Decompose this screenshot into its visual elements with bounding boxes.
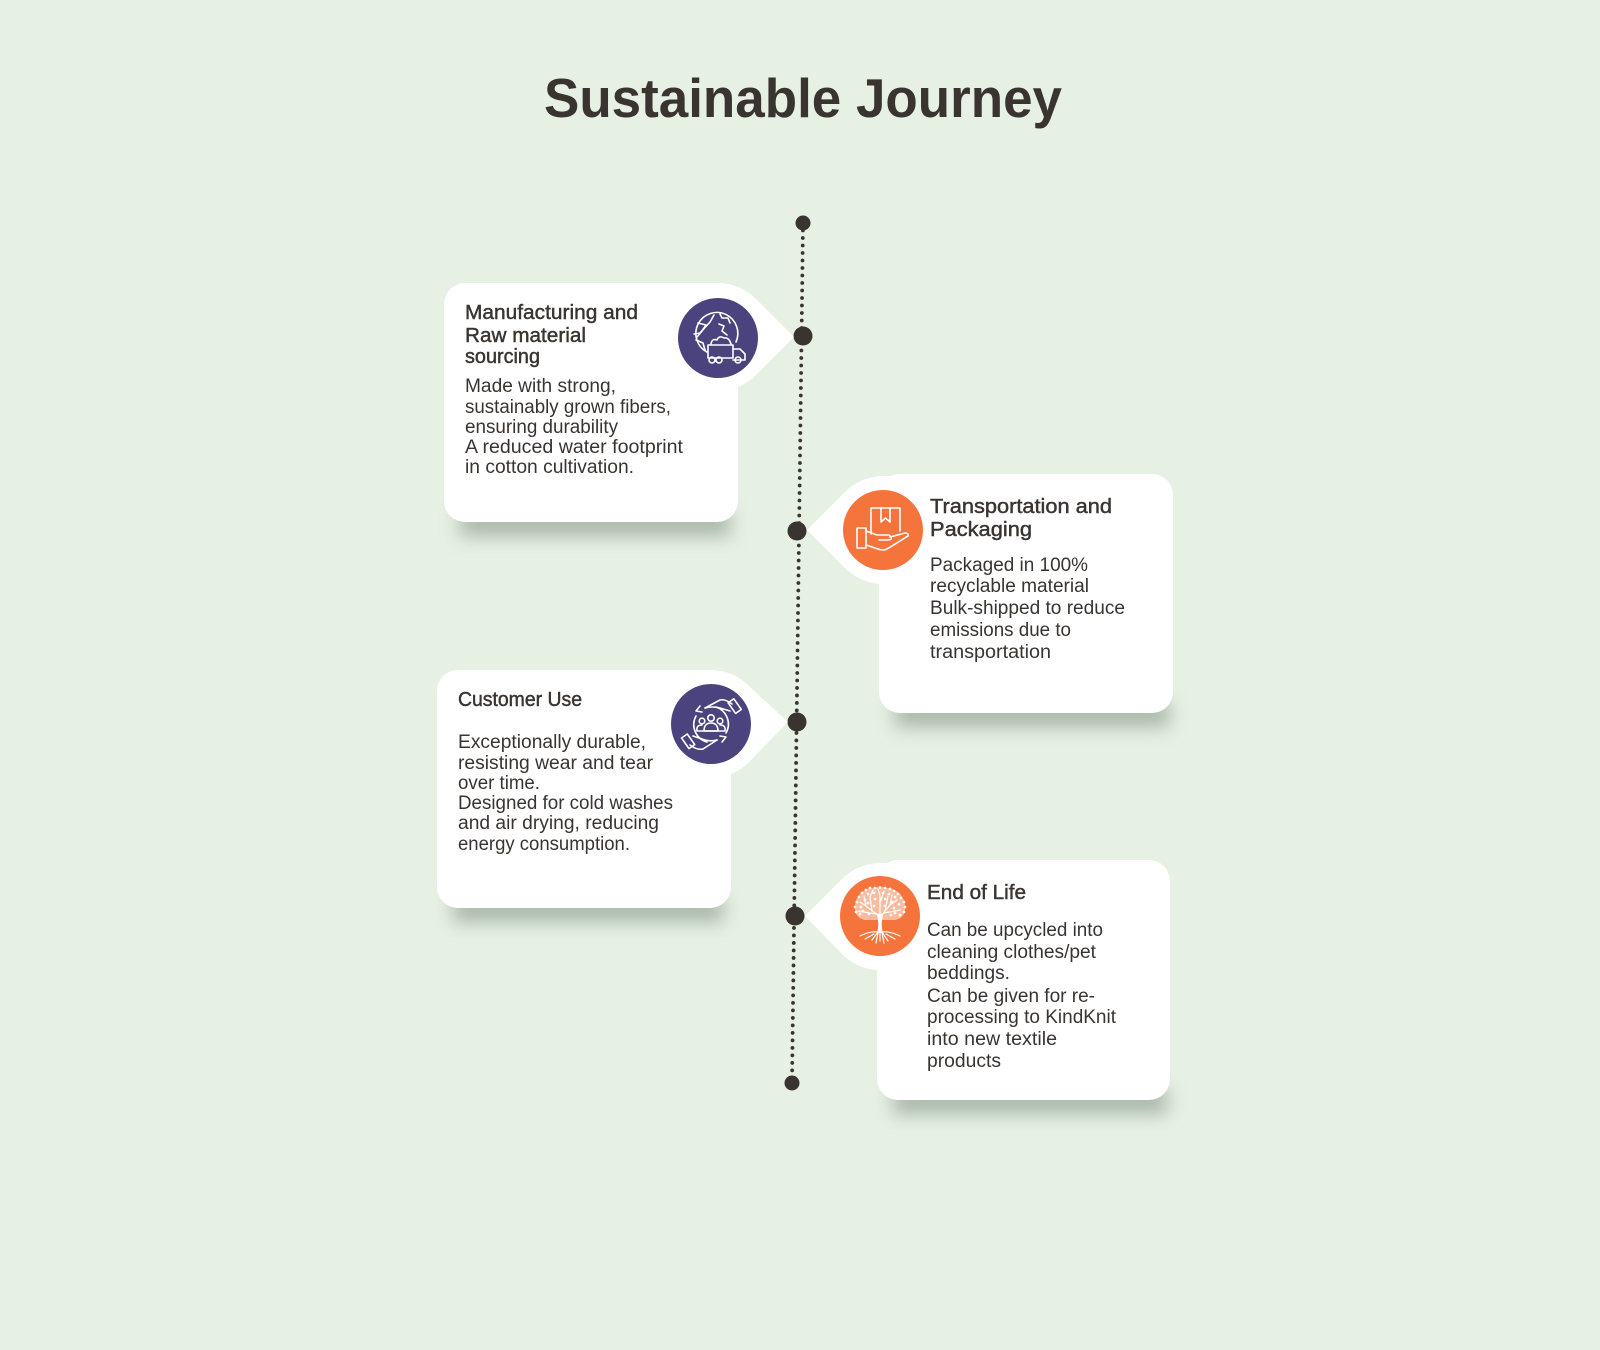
heading: manufacturing: Manufacturing and <box>465 301 638 324</box>
text: end of life details <box>927 920 1117 1072</box>
panel: manufacturing and raw material sourcing <box>444 283 794 536</box>
text: transportation details: emissions due to <box>930 620 1071 641</box>
icon: tree with roots <box>840 876 920 956</box>
text: end of life details: Can be upcycled into <box>927 920 1103 941</box>
icon: globe and truck <box>678 298 758 378</box>
heading: end of life: End of Life <box>927 881 1026 904</box>
panel: customer use <box>437 670 788 922</box>
text: manufacturing details: A reduced water footprint <box>465 437 684 458</box>
text: customer use details: resisting wear and tear <box>458 753 654 774</box>
text: manufacturing details <box>465 376 684 478</box>
text: transportation details: Packaged in 100% <box>930 555 1088 576</box>
heading: transportation <box>930 495 1112 541</box>
text: customer use details: over time. <box>458 773 540 794</box>
heading: manufacturing <box>465 301 638 368</box>
text: customer use details: Exceptionally durable, <box>458 732 646 753</box>
icon: hand holding box <box>843 490 923 570</box>
heading: transportation: Transportation and <box>930 495 1112 518</box>
text: manufacturing details: Made with strong, <box>465 376 616 397</box>
text: end of life details: beddings. <box>927 963 1010 984</box>
heading: manufacturing: sourcing <box>465 345 540 368</box>
text: customer use details: and air drying, reducing <box>458 813 659 834</box>
text: transportation details: Bulk-shipped to reduce <box>930 598 1125 619</box>
text: transportation details: transportation <box>930 642 1051 663</box>
text: manufacturing details: sustainably grown fibers, <box>465 397 671 418</box>
panel: end of life <box>805 860 1170 1114</box>
text: end of life details: products <box>927 1051 1001 1072</box>
heading: manufacturing: Raw material <box>465 324 586 347</box>
text: end of life details: cleaning clothes/pet <box>927 942 1097 963</box>
text: end of life details: Can be given for re- <box>927 986 1095 1007</box>
heading: transportation: Packaging <box>930 518 1032 541</box>
text: end of life details: processing to KindKnit <box>927 1007 1117 1028</box>
text: end of life details: into new textile <box>927 1029 1057 1050</box>
heading: customer use: Customer Use <box>458 688 582 711</box>
text: transportation details: recyclable material <box>930 576 1089 597</box>
text: manufacturing details: ensuring durability <box>465 417 618 438</box>
text: customer use details: energy consumption. <box>458 834 630 855</box>
title: Sustainable Journey <box>544 67 1062 129</box>
text: customer use details: Designed for cold washes <box>458 793 673 814</box>
panel: transportation and packaging <box>807 474 1173 727</box>
timeline <box>784 216 812 1090</box>
text: customer use details <box>458 732 673 855</box>
icon: hands and community <box>671 684 751 764</box>
text: transportation details <box>930 555 1125 663</box>
text: manufacturing details: in cotton cultivation. <box>465 457 634 478</box>
